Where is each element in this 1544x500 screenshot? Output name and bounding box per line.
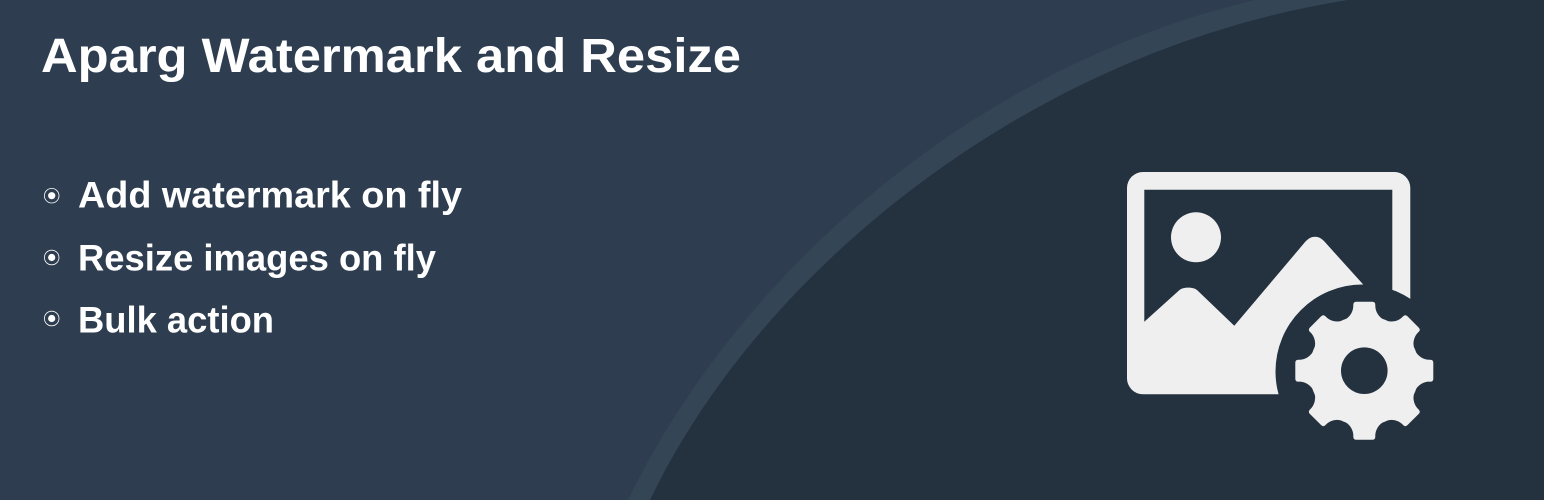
bullet item: resize images: Resize images on fly — [78, 238, 436, 279]
sun — [1171, 212, 1221, 262]
gear cutout — [1276, 284, 1450, 458]
picture frame — [1127, 172, 1410, 394]
bullet item: add watermark: Add watermark on fly — [78, 175, 462, 216]
mountains — [1140, 237, 1370, 385]
gear — [1295, 302, 1433, 440]
dark curved panel — [650, 0, 1544, 500]
icon: image with settings gear — [1127, 172, 1450, 458]
bullet item: bulk action: Bulk action — [78, 300, 274, 341]
title: Aparg Watermark and Resize — [41, 30, 741, 83]
curved lighter band — [628, 0, 1544, 500]
feature list — [44, 175, 462, 341]
